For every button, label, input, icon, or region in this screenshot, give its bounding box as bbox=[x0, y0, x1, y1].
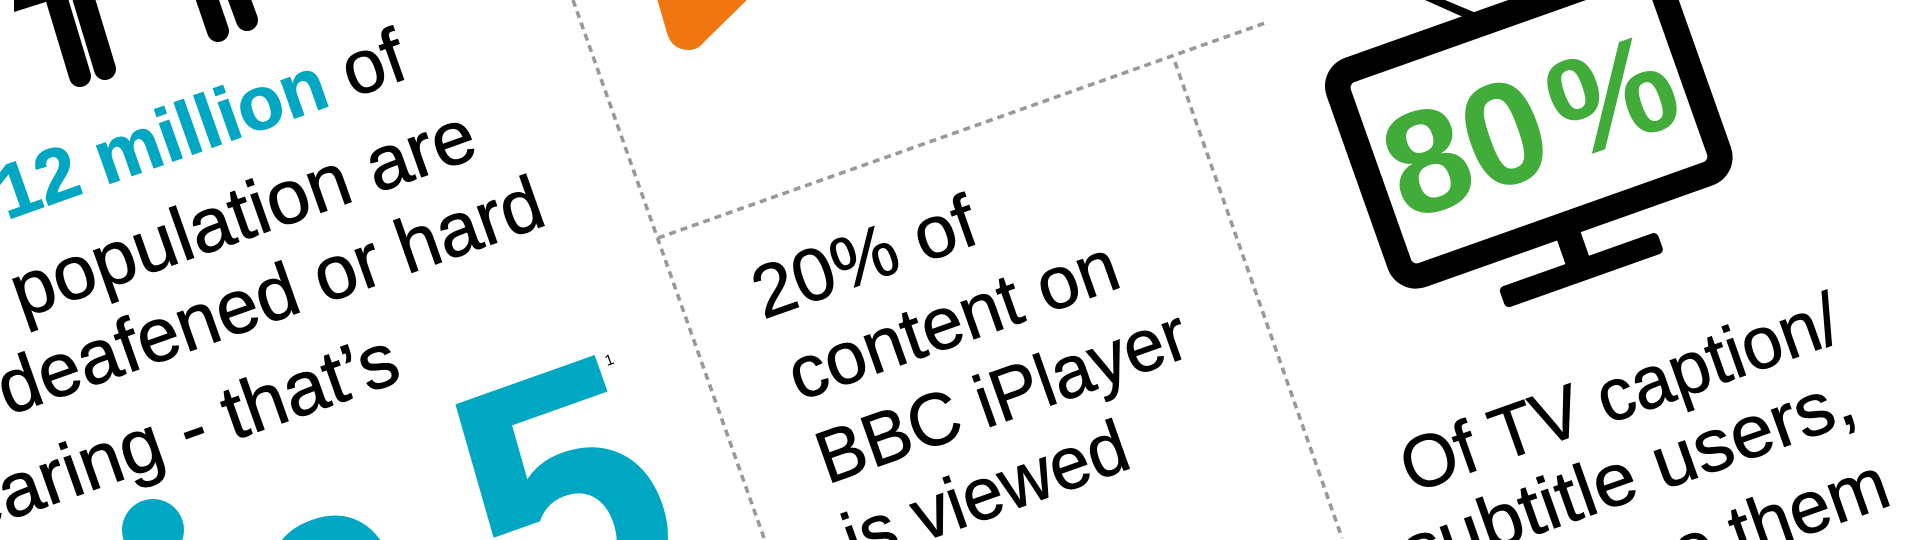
line: BBC iPlayer: BBC iPlayer bbox=[805, 292, 1198, 500]
figure: 80%: % bbox=[1527, 1, 1697, 190]
tv stand bbox=[1488, 202, 1664, 309]
tv frame bbox=[1317, 0, 1741, 297]
footnote marker: 1 bbox=[603, 351, 616, 370]
icon: people legs bbox=[14, 0, 247, 76]
icon: television with 80% bbox=[1317, 0, 1757, 341]
text block: iPlayer statistic bbox=[741, 179, 1198, 540]
line: Of TV caption/: Of TV caption/ bbox=[1389, 277, 1851, 509]
icon: orange play triangle tip bbox=[656, 0, 752, 50]
big number: 1 in 5 bbox=[89, 278, 722, 540]
text block: caption users statistic bbox=[1389, 277, 1899, 540]
line: deafened or hard: deafened or hard bbox=[0, 160, 555, 432]
figure: 80%: 80 bbox=[1362, 43, 1570, 251]
panel dividers: dotted lines bbox=[573, 0, 1342, 538]
line: 20% of: 20% of bbox=[741, 179, 988, 335]
text block: 12 million statistic bbox=[0, 13, 555, 540]
line: content on: content on bbox=[776, 223, 1129, 416]
figure: 80% bbox=[1362, 0, 1698, 251]
icon: tv antenna bbox=[1425, 0, 1476, 17]
tv screen bbox=[1349, 0, 1709, 265]
